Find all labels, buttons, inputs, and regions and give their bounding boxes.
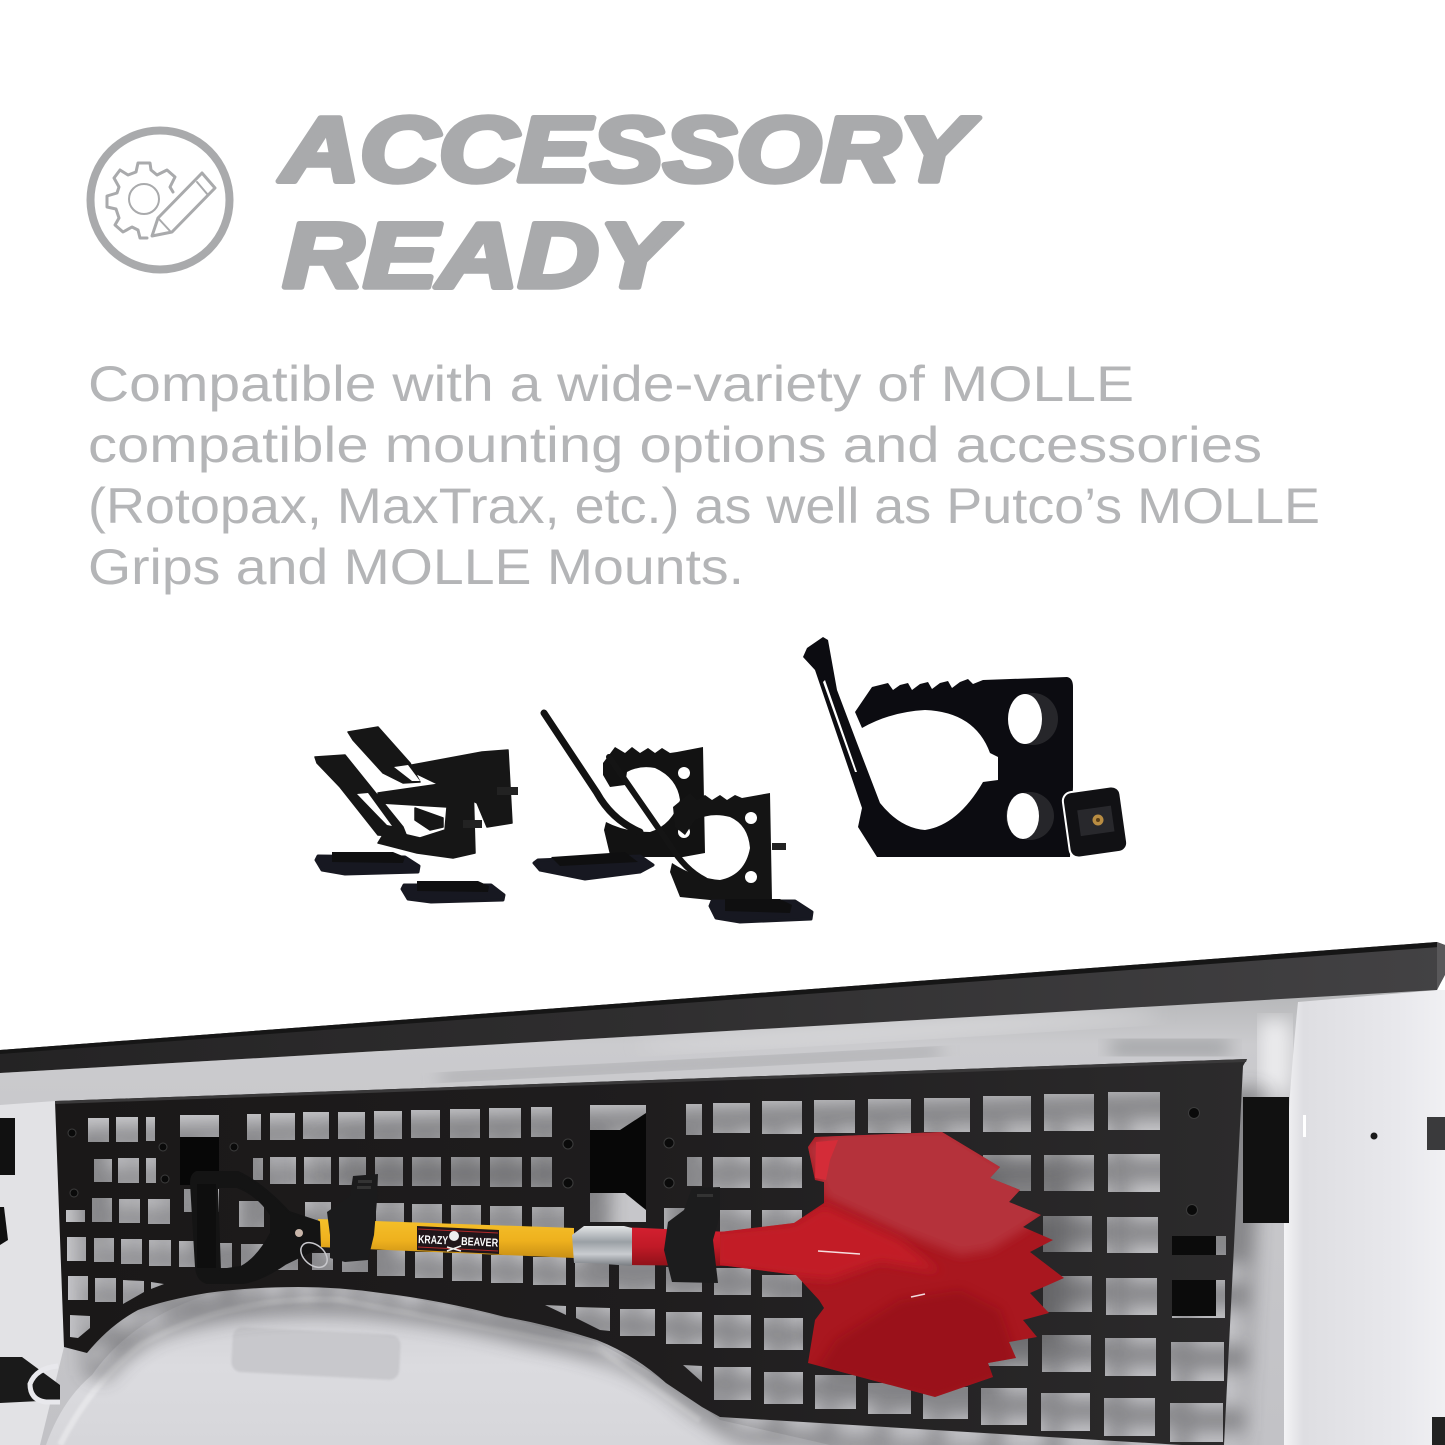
photo: left grip clip [327,1174,378,1262]
title: READY [283,205,682,307]
body text: Grips and MOLLE Mounts. [88,539,744,595]
body text: compatible mounting options and accessories [88,417,1262,473]
icon: gear and pencil in circle [90,130,230,270]
shaft label [417,1226,499,1254]
photo: bed wall background [0,990,1445,1445]
icon: square mount pad [1062,785,1128,859]
photo: top rail [0,942,1445,1073]
product: open MOLLE grips front view [544,713,786,902]
title [279,99,980,307]
body text: (Rotopax, MaxTrax, etc.) as well as Putco’s MOLLE [88,478,1320,534]
photo: shovel shaft [318,1219,730,1266]
photo: wheel well dome [46,1287,830,1445]
photo: MOLLE panel [55,1059,1247,1445]
body text: Compatible with a wide-variety of MOLLE [88,356,1134,412]
photo: dark shadow blotches on wall [330,1150,1080,1350]
shaft label: BEAVER [461,1236,499,1250]
title: ACCESSORY [279,99,980,201]
photo: red shovel blade [715,1128,1064,1400]
product: folded MOLLE grips side view [315,727,518,858]
product: mounting pads [316,852,812,922]
body text [88,356,1320,595]
product: large MOLLE grip [803,637,1128,859]
screws [68,1108,1200,1216]
photo: right grip clip [664,1187,720,1283]
shaft label: KRAZY [418,1234,449,1247]
photo: panel cast shadow [75,1087,1267,1445]
photo: D-handle [191,1172,332,1283]
photo: mounting brackets and left hardware [0,1097,1289,1403]
photo: tailgate post [1284,990,1445,1445]
